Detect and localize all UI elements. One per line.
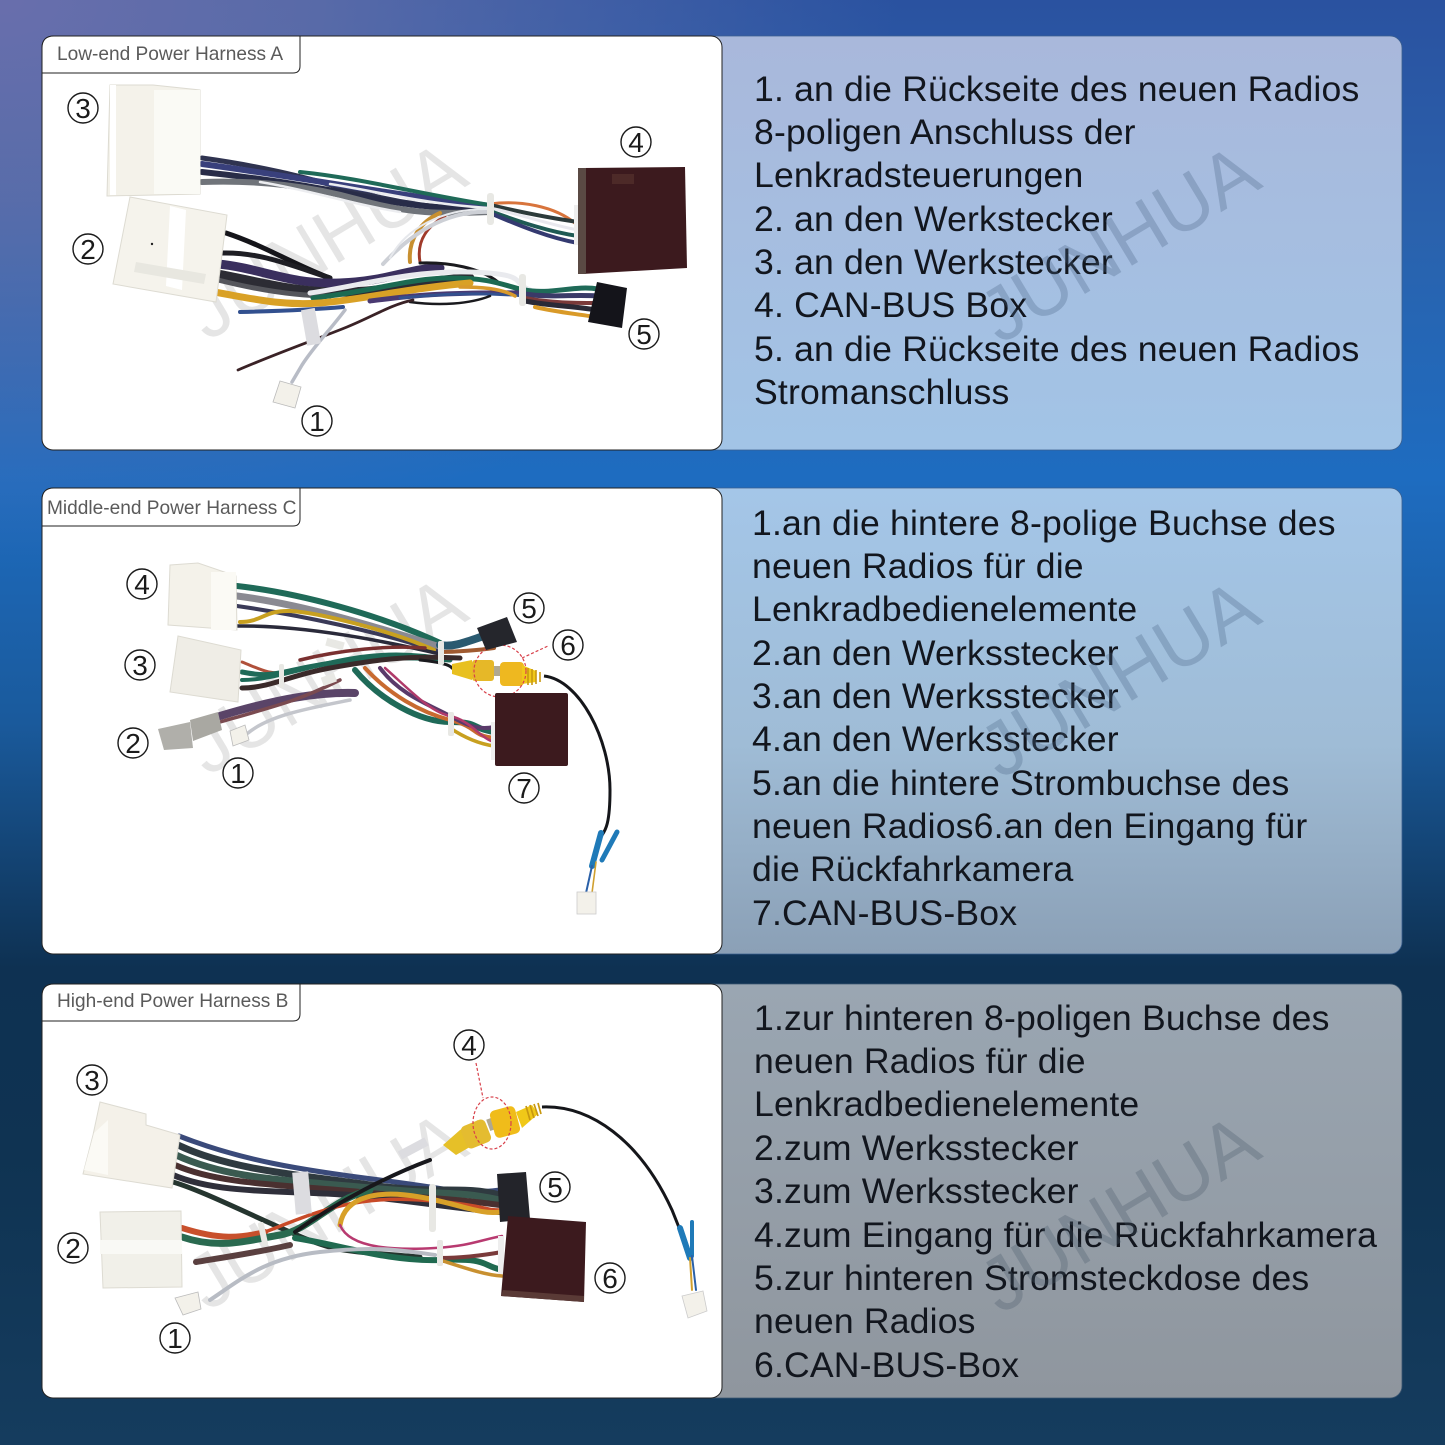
number 4: 4 [134,569,150,600]
number 6 [595,1263,625,1294]
watermark right B: JUNHUA [965,1098,1273,1330]
CAN-BUS box B [498,1216,586,1302]
description text B: 5.zur hinteren Stromsteckdose des [754,1258,1309,1298]
plug camera B [682,1291,707,1318]
camera cable B [542,1107,684,1240]
number 2 [118,728,148,759]
image area B [42,984,722,1398]
number 6: 6 [560,630,576,661]
plug camera C [577,892,596,914]
number 1 [223,758,253,789]
dashed callout circle B [473,1063,511,1149]
description text C: 1.an die hintere 8-polige Buchse des [752,503,1336,543]
description text A: 8-poligen Anschluss der [754,112,1136,152]
number 3 [68,93,98,124]
cable label A [301,308,321,346]
description text C: neuen Radios6.an den Eingang für [752,806,1307,846]
watermark right A: JUNHUA [965,128,1273,360]
number 3: 3 [75,93,91,124]
number 4 [621,127,651,158]
connector 2 A [113,197,227,302]
tab label C: Middle-end Power Harness C [47,498,297,519]
description text C: 2.an den Werksstecker [752,633,1119,673]
tab label B: High-end Power Harness B [57,991,288,1012]
panel: harness B [42,984,1402,1398]
tab label A: Low-end Power Harness A [57,44,283,65]
watermark right C: JUNHUA [965,563,1273,795]
callouts A [68,93,659,437]
description text A: Lenkradsteuerungen [754,155,1083,195]
description text B: Lenkradbedienelemente [754,1084,1139,1124]
number 6: 6 [602,1263,618,1294]
watermark left C: JUNHUA [172,560,480,792]
CAN-BUS box A [574,167,687,274]
wiring A [202,158,598,382]
description background B [42,984,1402,1398]
number 3: 3 [84,1065,100,1096]
number 4: 4 [628,127,644,158]
RCA plugs C [452,660,540,686]
blue sleeves B [680,1222,696,1290]
number 2: 2 [80,234,96,265]
description text B: 4.zum Eingang für die Rückfahrkamera [754,1215,1377,1255]
description text A: 3. an den Werkstecker [754,242,1113,282]
description text C: neuen Radios für die [752,546,1084,586]
number 5 [514,593,544,624]
cable ties C [279,638,454,736]
connector 2 C [158,712,222,750]
cable ties B [258,1137,443,1266]
dashed callout circle C [474,645,548,697]
callouts B [58,1030,625,1354]
RCA plugs B [443,1103,541,1155]
description text C: 5.an die hintere Strombuchse des [752,763,1289,803]
description text A: 4. CAN-BUS Box [754,285,1027,325]
description text A: 2. an den Werkstecker [754,199,1113,239]
panel: harness C [42,488,1402,954]
plug 1 C [230,725,249,746]
connector 5 A [588,282,627,328]
description background A [42,36,1402,450]
number 1 [160,1323,190,1354]
number 5: 5 [521,593,537,624]
connector 5 B [497,1172,530,1222]
description text B: 3.zum Werksstecker [754,1171,1079,1211]
number 6 [553,630,583,661]
number 1: 1 [230,758,246,789]
description text A: 1. an die Rückseite des neuen Radios [754,69,1359,109]
number 4 [454,1030,484,1061]
number 4 [127,569,157,600]
watermark left A: JUNHUA [172,125,480,357]
connector 3 C [170,636,241,702]
number 3 [125,650,155,681]
connector 2 B [100,1211,182,1288]
number 2: 2 [125,728,141,759]
number 3: 3 [132,650,148,681]
callouts C [118,569,583,804]
plug 1 A [273,381,301,408]
description text B: 6.CAN-BUS-Box [754,1345,1019,1385]
number 7 [509,773,539,804]
tab label A [42,36,300,73]
connector 4 C [168,563,237,630]
wiring C [220,586,617,893]
cable ties A [487,193,526,306]
description background C [42,488,1402,954]
connector 3 A [107,85,200,196]
blue sleeves C [586,832,617,893]
description text C: Lenkradbedienelemente [752,589,1137,629]
number 1 [302,406,332,437]
plug 1 B [175,1292,201,1315]
number 5: 5 [547,1172,563,1203]
connector 5 C [477,617,517,650]
description text C: 4.an den Werksstecker [752,719,1119,759]
tab label C [42,488,300,526]
panel: harness A [42,36,1402,450]
number 5 [540,1172,570,1203]
number 1: 1 [309,406,325,437]
tab label B [42,984,300,1021]
description text C: die Rückfahrkamera [752,849,1073,889]
image area A [42,36,722,450]
description text A: 5. an die Rückseite des neuen Radios [754,329,1359,369]
number 2 [58,1233,88,1264]
description text C: 3.an den Werksstecker [752,676,1119,716]
connector 3 B [83,1102,180,1188]
wiring B [173,1107,696,1300]
image area C [42,488,722,954]
description text B: neuen Radios für die [754,1041,1086,1081]
number 5: 5 [636,319,652,350]
camera cable C [544,676,610,845]
description text C: 7.CAN-BUS-Box [752,893,1017,933]
number 7: 7 [516,773,532,804]
description text B: neuen Radios [754,1301,976,1341]
number 5 [629,319,659,350]
number 1: 1 [167,1323,183,1354]
number 4: 4 [461,1030,477,1061]
description text B: 2.zum Werksstecker [754,1128,1079,1168]
CAN-BUS box C [491,693,568,766]
number 2: 2 [65,1233,81,1264]
number 3 [77,1065,107,1096]
watermark left B: JUNHUA [172,1095,480,1327]
number 2 [73,234,103,265]
description text A: Stromanschluss [754,372,1009,412]
description text B: 1.zur hinteren 8-poligen Buchse des [754,998,1330,1038]
